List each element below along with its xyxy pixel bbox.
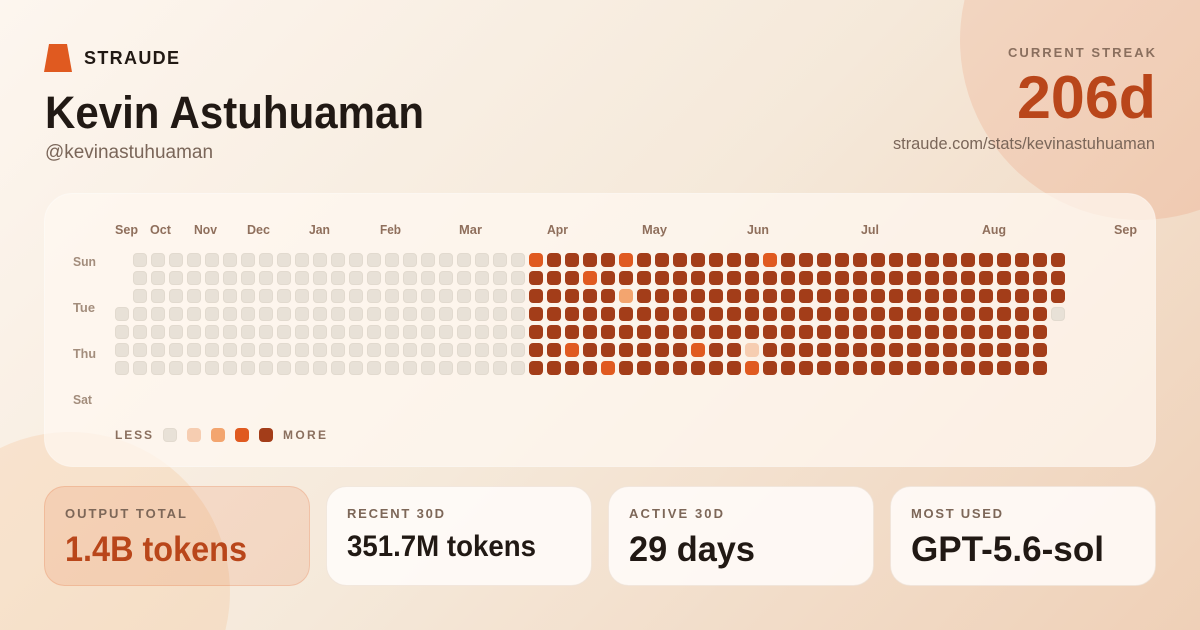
- title: user name: Kevin Astuhuaman: [45, 87, 424, 138]
- medium activity cell: [619, 289, 633, 303]
- inactive cells: [115, 253, 1065, 375]
- panel background: [44, 194, 1156, 466]
- month labels: Sep: [1114, 223, 1137, 237]
- decorative circle bottom left: [0, 432, 230, 630]
- panel: activity heatmap: [44, 194, 1156, 466]
- month labels: Nov: [194, 223, 217, 237]
- weekday labels: Sat: [73, 393, 93, 407]
- streak block: [893, 45, 1156, 153]
- legend high label: MORE: [283, 428, 326, 442]
- legend swatches: [164, 428, 273, 442]
- card label: MOST USED: [911, 506, 1002, 521]
- streak label: CURRENT STREAK: [1008, 45, 1156, 60]
- month labels: Sep: [115, 223, 138, 237]
- header: brand and profile: [44, 44, 424, 163]
- low activity cell: [745, 343, 759, 357]
- weekday labels: Sun: [73, 255, 96, 269]
- card label: OUTPUT TOTAL: [65, 506, 186, 521]
- card value: GPT-5.6-sol: [911, 530, 1104, 569]
- card label: ACTIVE 30D: [629, 506, 723, 521]
- card value: 1.4B tokens: [65, 530, 247, 569]
- month labels: Jan: [309, 223, 330, 237]
- brand name: STRAUDE: [84, 48, 179, 68]
- weekday labels: Tue: [73, 301, 95, 315]
- month labels: Feb: [380, 223, 401, 237]
- stat card: most used: [890, 486, 1156, 586]
- weekday labels: Thu: [73, 347, 96, 361]
- month labels: Apr: [547, 223, 568, 237]
- legend low label: LESS: [115, 428, 152, 442]
- contribution grid: [115, 252, 1066, 377]
- stat card: recent 30d: [326, 486, 592, 586]
- decorative circle top right: [960, 0, 1200, 220]
- weekday labels: [73, 255, 96, 407]
- legend: [115, 428, 326, 442]
- high activity cells: [529, 253, 777, 375]
- streak value: 206d: [1017, 64, 1156, 131]
- month labels: Jun: [747, 223, 769, 237]
- stat card: output total: [44, 486, 310, 586]
- icon: straude logo: [44, 44, 72, 72]
- month labels: Aug: [982, 223, 1006, 237]
- month labels: [115, 223, 1137, 237]
- profile url: straude.com/stats/kevinastuhuaman: [893, 135, 1155, 153]
- month labels: Mar: [459, 223, 482, 237]
- month labels: Oct: [150, 223, 172, 237]
- card value: 351.7M tokens: [347, 530, 536, 563]
- card label: RECENT 30D: [347, 506, 444, 521]
- month labels: Jul: [861, 223, 879, 237]
- card value: 29 days: [629, 530, 755, 569]
- month labels: May: [642, 223, 667, 237]
- user handle: @kevinastuhuaman: [45, 142, 213, 163]
- stat card: active 30d: [608, 486, 874, 586]
- active cells: [528, 252, 1066, 377]
- month labels: Dec: [247, 223, 270, 237]
